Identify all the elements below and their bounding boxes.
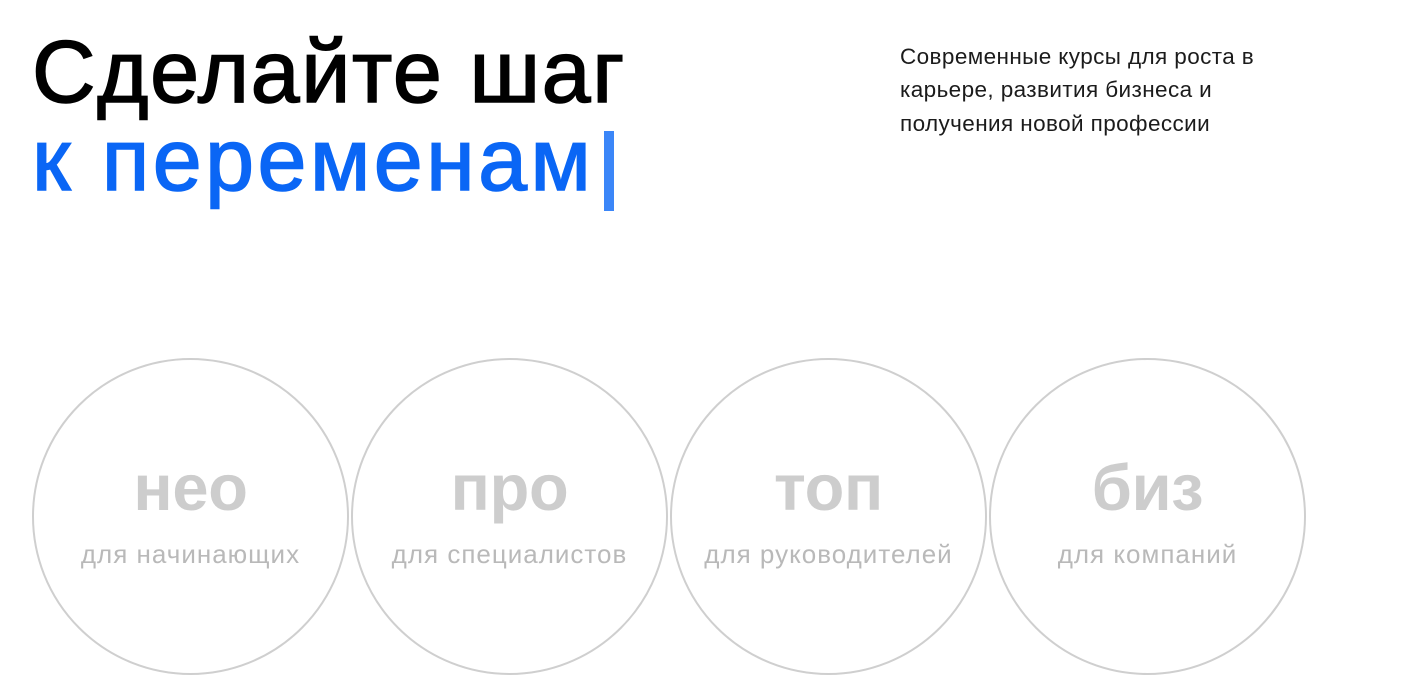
title line 1: Сделайте шаг: [32, 22, 626, 121]
circle: про: [351, 358, 668, 675]
description text: Современные курсы для роста в: [900, 44, 1254, 68]
label: нео: нео: [133, 451, 248, 524]
description text: [900, 44, 1254, 136]
circle: топ: [670, 358, 987, 675]
title: [32, 22, 626, 210]
label: топ: топ: [774, 451, 883, 524]
circle: биз: [989, 358, 1306, 675]
title line 2: к переменам: [32, 110, 594, 209]
caption: для специалистов: для специалистов: [392, 539, 627, 569]
caption: для руководителей: для руководителей: [704, 539, 953, 569]
description text: карьере, развития бизнеса и: [900, 77, 1212, 102]
caption: для компаний: для компаний: [1058, 539, 1237, 569]
circle: нео: [32, 358, 349, 675]
label: биз: биз: [1092, 451, 1203, 524]
label: про: про: [451, 451, 568, 524]
description text: получения новой профессии: [900, 110, 1210, 136]
text cursor: [604, 131, 614, 211]
caption: для начинающих: для начинающих: [81, 539, 300, 569]
